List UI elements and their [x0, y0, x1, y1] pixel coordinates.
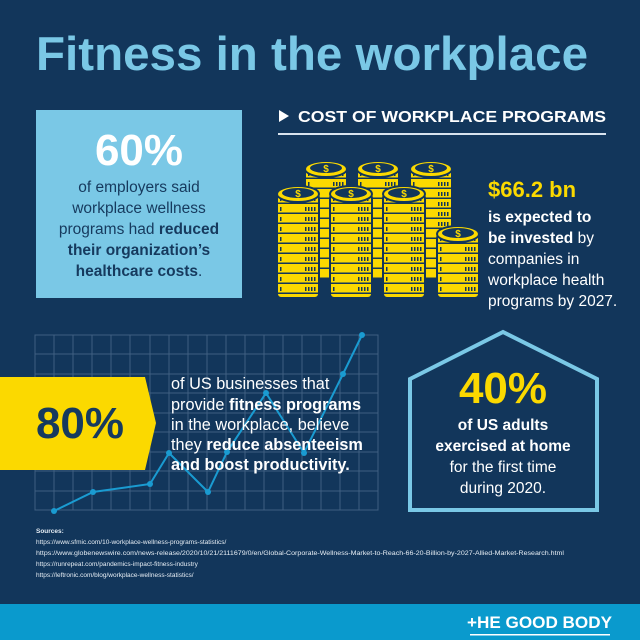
panel: house 40%: of US adults	[458, 417, 548, 434]
panel: 60% employers	[36, 110, 242, 298]
icon: coin stacks: $	[323, 164, 329, 175]
text: sources: Sources:	[36, 528, 64, 535]
title: Fitness in the workplace	[36, 27, 588, 80]
text: sources	[36, 528, 565, 579]
text: $66.2 bn	[487, 177, 617, 310]
panel: house 40%: 40%	[459, 364, 547, 413]
icon: coin stacks: $	[348, 189, 354, 200]
icon: coin stacks: $	[428, 164, 434, 175]
panel: 60% employers: of employers said	[78, 179, 200, 196]
panel: house 40%: for the first time	[450, 459, 556, 476]
panel: house 40%: exercised at home	[435, 438, 571, 455]
panel: house 40%: during 2020.	[460, 480, 546, 497]
panel: 60% employers: programs had reduced	[59, 221, 219, 238]
text: $66.2 bn: workplace health	[487, 272, 604, 289]
text: 80% description	[171, 375, 363, 474]
text: sources: https://leftronic.com/blog/workplace-wellness-statistics/	[36, 572, 194, 579]
icon: coin stacks: $	[455, 229, 461, 240]
footer bar	[0, 604, 640, 640]
text: $66.2 bn: be invested by	[488, 230, 594, 247]
text: 80% description: they reduce absenteeism	[171, 436, 363, 454]
icon: coin stacks: $	[295, 189, 301, 200]
heading: cost of workplace programs	[278, 109, 606, 135]
icon: coin stacks: $	[401, 189, 407, 200]
text: 80% description: provide fitness programs	[171, 396, 361, 414]
text: 80% description: in the workplace, believe	[171, 416, 349, 434]
text: $66.2 bn: is expected to	[488, 209, 591, 226]
panel: 60% employers: workplace wellness	[71, 200, 206, 217]
text: sources: https://www.globenewswire.com/news-release/2020/10/21/2111679/0/en/Global-Corporate-Wellness-Market-to-Reach-66-20-Billion-by-2027-Allied-Market-Research.html	[36, 550, 565, 557]
text: 80% description: of US businesses that	[171, 375, 330, 393]
chart: line graph grid	[35, 332, 378, 514]
panel: 60% employers: their organization’s	[68, 242, 210, 259]
panel: 60% employers: healthcare costs.	[76, 263, 202, 280]
text: sources: https://runrepeat.com/pandemics-impact-fitness-industry	[36, 561, 199, 568]
banner: 80%: 80%	[36, 399, 124, 448]
text: $66.2 bn: $66.2 bn	[488, 177, 576, 202]
banner: 80%	[0, 377, 156, 470]
text: $66.2 bn: programs by 2027.	[488, 293, 617, 310]
icon: coin stacks	[277, 161, 479, 298]
panel: house 40%	[410, 332, 597, 510]
logo: the good body: +HE GOOD BODY	[467, 613, 613, 632]
panel: 60% employers: 60%	[95, 126, 183, 175]
text: sources: https://www.sfmic.com/10-workplace-wellness-programs-statistics/	[36, 539, 227, 546]
icon: coin stacks: $	[375, 164, 381, 175]
heading: cost of workplace programs: COST OF WORKPLACE PROGRAMS	[298, 109, 606, 126]
text: 80% description: and boost productivity.	[171, 456, 350, 474]
text: $66.2 bn: companies in	[488, 251, 579, 268]
